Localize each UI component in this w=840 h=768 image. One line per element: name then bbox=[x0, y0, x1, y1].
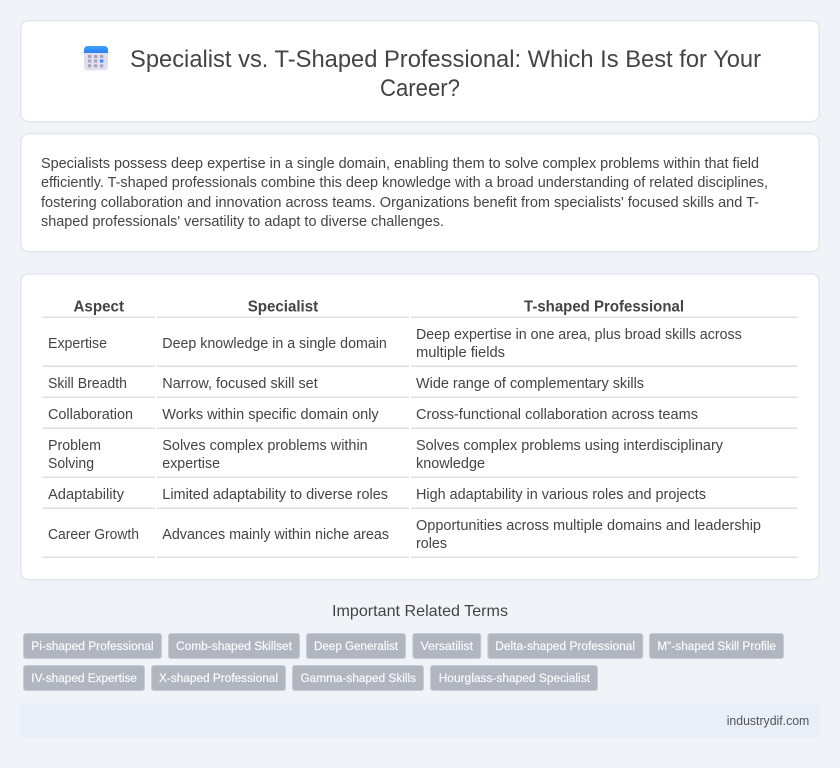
tag list: related terms: Deep Generalist bbox=[314, 639, 399, 653]
icon: calendar bbox=[84, 46, 108, 70]
tag list: related terms bbox=[24, 634, 784, 690]
table header row: T-shaped Professional bbox=[524, 298, 684, 316]
row: adaptability: Adaptability bbox=[48, 487, 125, 503]
row: skill breadth: Narrow, focused skill set bbox=[162, 376, 318, 392]
row: collaboration: Cross-functional collaboration across teams bbox=[416, 407, 698, 423]
row: career growth: Opportunities across multiple domains and leadership bbox=[416, 518, 761, 534]
footer bbox=[20, 704, 820, 738]
tag list: related terms: Delta-shaped Professional bbox=[495, 639, 635, 653]
text block: description bbox=[41, 156, 768, 230]
row: adaptability: Limited adaptability to diverse roles bbox=[162, 487, 388, 503]
row: expertise: Expertise bbox=[48, 336, 107, 352]
table header row: Aspect bbox=[74, 298, 124, 316]
text block: description: fostering collaboration and innovation across teams. Organizations benefit from specialists' focused skills and T- bbox=[41, 195, 759, 211]
title: Career? bbox=[380, 75, 460, 102]
row: career growth: Advances mainly within niche areas bbox=[162, 527, 389, 543]
tag list: related terms: Hourglass-shaped Specialist bbox=[439, 671, 591, 685]
row: career growth: Career Growth bbox=[48, 527, 139, 543]
row: expertise: Deep knowledge in a single domain bbox=[162, 336, 387, 352]
tag list: related terms: Pi-shaped Professional bbox=[31, 639, 154, 653]
row: problem solving: expertise bbox=[162, 456, 220, 472]
row: expertise: multiple fields bbox=[416, 345, 505, 361]
row: expertise bbox=[48, 327, 742, 361]
row: skill breadth: Skill Breadth bbox=[48, 376, 127, 392]
footer: industrydif.com bbox=[727, 714, 809, 728]
row: skill breadth bbox=[48, 376, 644, 392]
row: career growth: roles bbox=[416, 536, 447, 552]
row: collaboration: Works within specific domain only bbox=[162, 407, 379, 423]
row: collaboration bbox=[48, 407, 698, 423]
title bbox=[130, 46, 761, 102]
panel: header bbox=[21, 21, 819, 122]
row: problem solving: Solves complex problems within bbox=[162, 438, 368, 454]
row: problem solving: Solving bbox=[48, 456, 94, 472]
row: career growth bbox=[48, 518, 761, 552]
table header row: Specialist bbox=[248, 298, 318, 316]
row: skill breadth: Wide range of complementary skills bbox=[416, 376, 644, 392]
tag list: related terms: Versatilist bbox=[420, 639, 474, 653]
tag list: related terms: Gamma-shaped Skills bbox=[300, 671, 416, 685]
title: Specialist vs. T-Shaped Professional: Which Is Best for Your bbox=[130, 46, 761, 73]
table header row bbox=[74, 298, 684, 316]
text block: description: efficiently. T-shaped professionals combine this deep knowledge with a broad understanding of related disciplines, bbox=[41, 175, 768, 191]
row: problem solving: knowledge bbox=[416, 456, 485, 472]
tag list: related terms: Comb-shaped Skillset bbox=[176, 639, 293, 653]
tag list: related terms: X-shaped Professional bbox=[159, 671, 278, 685]
text block: description: Specialists possess deep expertise in a single domain, enabling them to solve complex problems within that field bbox=[41, 156, 759, 172]
text block: description: shaped professionals' versatility to adapt to diverse challenges. bbox=[41, 214, 444, 230]
row: adaptability bbox=[48, 487, 706, 503]
row: expertise: Deep expertise in one area, plus broad skills across bbox=[416, 327, 742, 343]
tag list: related terms: IV-shaped Expertise bbox=[31, 671, 137, 685]
row: problem solving: Solves complex problems using interdisciplinary bbox=[416, 438, 724, 454]
panel: description bbox=[21, 134, 819, 252]
heading: related terms: Important Related Terms bbox=[332, 603, 508, 620]
row: problem solving: Problem bbox=[48, 438, 101, 454]
panel: comparison table bbox=[21, 274, 819, 580]
tag list: related terms: M"-shaped Skill Profile bbox=[657, 639, 776, 653]
row: collaboration: Collaboration bbox=[48, 407, 133, 423]
row: problem solving bbox=[48, 438, 724, 472]
row: adaptability: High adaptability in various roles and projects bbox=[416, 487, 706, 503]
